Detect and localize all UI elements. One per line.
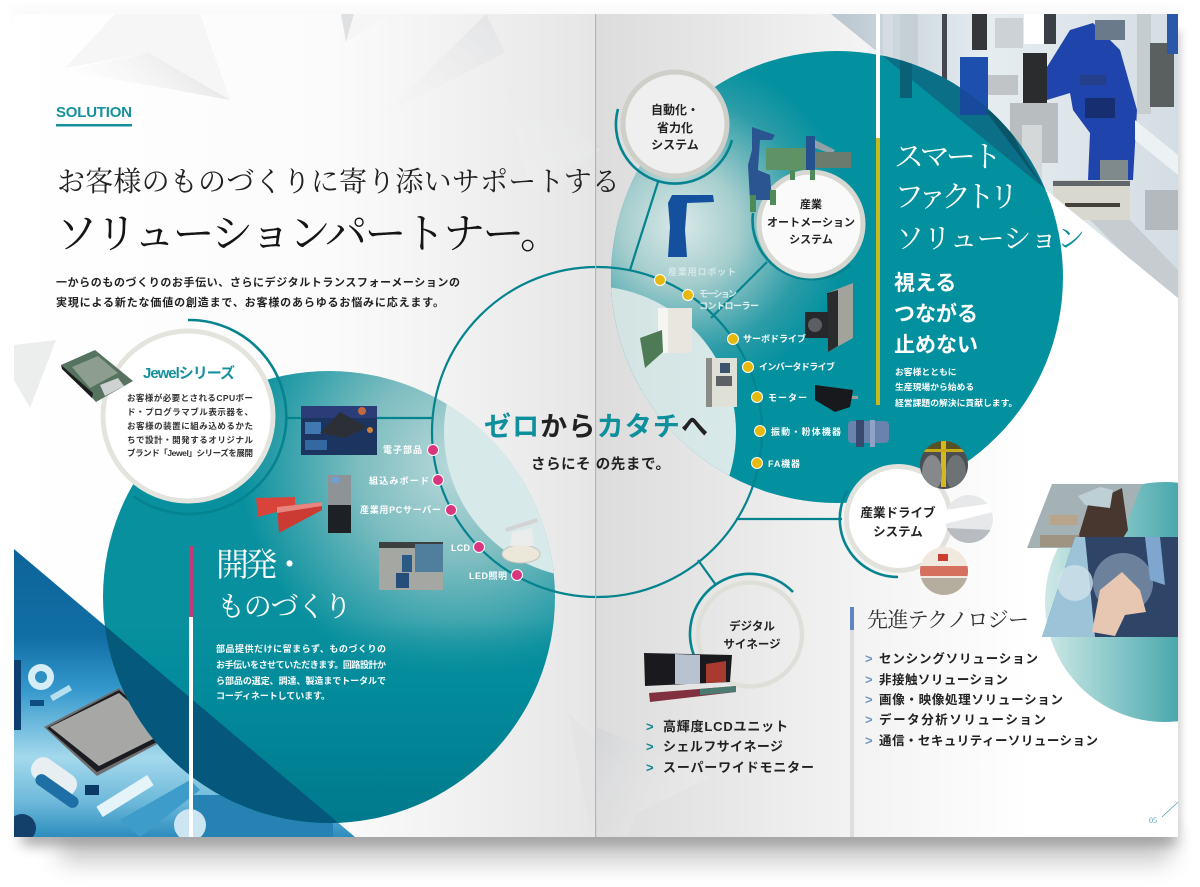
heading: smart factory solution: スマート: [894, 141, 1002, 174]
text: development description: ら部品の選定、調達、製造までトータルで: [216, 675, 386, 686]
heading tag: SOLUTION: SOLUTION: [56, 104, 132, 121]
pink markers and labels: 産業用PCサーバー: [360, 504, 441, 515]
yellow markers and labels: モーション: [699, 289, 737, 299]
icon: vibration motor: [848, 420, 889, 447]
panel: Jewel series circle: ブランド「Jewel」シリーズを展開: [127, 448, 253, 458]
icon: motor: [815, 385, 858, 412]
list: advanced technology solutions: 画像・映像処理ソリューション: [879, 692, 1063, 707]
list: signage products: シェルフサイネージ: [663, 739, 783, 754]
list: advanced technology solutions: >: [865, 733, 873, 748]
left page background: [14, 14, 596, 837]
text: development description: コーディネートしています。: [216, 690, 330, 701]
list: advanced technology solutions: データ分析ソリューション: [879, 712, 1046, 727]
yellow markers and labels: サーボドライブ: [743, 333, 806, 344]
panel: industrial automation system circle: オートメーション: [767, 216, 855, 229]
panel: industrial automation system circle: [759, 172, 863, 276]
heading: development and manufacturing: [189, 546, 352, 837]
panel: advanced technology teal circle: [1045, 482, 1178, 722]
list: signage products: >: [646, 719, 654, 734]
title: [56, 166, 620, 258]
panel: automation system circle: [623, 72, 727, 176]
text: smart factory description: お客様とともに: [895, 366, 957, 377]
decorative low-poly triangles: [14, 14, 710, 837]
pink markers and labels: LCD: [451, 543, 470, 553]
icon: servo drive: [805, 283, 853, 352]
list: advanced technology solutions: >: [865, 651, 873, 666]
photo: factory robot: [831, 14, 1178, 298]
panel: Jewel series circle: ド・プログラマブル表示器を、: [127, 407, 253, 417]
icon: LCD wall: [379, 542, 443, 590]
pink markers and labels: [360, 444, 522, 581]
center message: さらにそ の先まで。: [531, 456, 670, 473]
icon: boards and PC server: [256, 475, 351, 533]
photo: VR headset woman: [1027, 484, 1142, 548]
panel: industrial automation system circle: システム: [789, 233, 833, 246]
panel: digital signage circle: [698, 582, 802, 686]
panel: Jewel series circle: お客様の装置に組み込めるかた: [127, 421, 253, 431]
icon: chip on circuit board: [44, 688, 174, 776]
panel: Jewel series circle: ちで設計・開発するオリジナル: [127, 435, 253, 445]
list: advanced technology solutions: >: [865, 672, 873, 687]
photo: red-capped bottles: [920, 547, 968, 595]
list: signage products: 高輝度LCDユニット: [663, 719, 788, 734]
panel: automation system circle: 省力化: [657, 120, 693, 135]
panel: development teal circle: [103, 371, 555, 823]
panel: digital signage circle: デジタル: [729, 619, 775, 633]
panel: Jewel series circle: Jewelシリーズ: [143, 364, 235, 382]
panel: digital signage circle: サイネージ: [723, 638, 781, 651]
list: advanced technology solutions: センシングソリューション: [879, 651, 1038, 666]
icon: automation line robots: [748, 127, 851, 212]
spine fold line: [595, 14, 596, 837]
panel: Jewel series circle: お客様が必要とされるCPUボー: [127, 393, 253, 403]
panel: industrial drive system circle: 産業ドライブ: [860, 505, 936, 520]
heading: advanced technology: 先進テクノロジー: [867, 608, 1029, 632]
text: development description: 部品提供だけに留まらず、ものづくりの: [216, 643, 386, 654]
photo: white rolls: [945, 495, 993, 543]
list: signage products: >: [646, 760, 654, 775]
text: smart factory description: 生産現場から始める: [895, 381, 974, 392]
yellow markers and labels: FA機器: [768, 458, 800, 469]
pink markers and labels: 電子部品: [383, 444, 422, 455]
panel: smart factory teal circle: [611, 51, 1063, 503]
icon: Jewel circuit board: [61, 350, 133, 402]
intro text: 一からのものづくりのお手伝い、さらにデジタルトランスフォーメーションの: [56, 275, 460, 289]
panel: industrial drive system circle: システム: [873, 525, 923, 539]
yellow markers and labels: モーター: [768, 392, 807, 403]
panel: automation system circle: 自動化・: [651, 102, 699, 117]
icon: LED light: [502, 518, 540, 563]
text: see, connect, don't stop: 視える: [894, 272, 956, 295]
text: smart factory description: 経営課題の解決に貢献します。: [895, 397, 1017, 408]
photo: hand touching interface: [1042, 537, 1178, 637]
icon: blue robot arm: [668, 195, 714, 257]
icon: electronic parts photo: [301, 406, 377, 455]
heading: smart factory solution: ソリューション: [896, 224, 1085, 255]
list: signage products: スーパーワイドモニター: [663, 760, 814, 775]
pink markers and labels: LED照明: [469, 571, 507, 581]
icon: inverter: [706, 358, 737, 407]
title: お客様のものづくりに寄り添いサポートする: [57, 166, 620, 198]
heading: development and manufacturing: 開発・: [216, 547, 306, 584]
text: see, connect, don't stop: [894, 272, 978, 357]
text: see, connect, don't stop: つながる: [894, 302, 978, 326]
text: smart factory description: [895, 366, 1017, 408]
icon: motion controller: [640, 308, 692, 368]
intro text: 実現による新たな価値の創造まで、お客様のあらゆるお悩みに応えます。: [56, 295, 444, 309]
yellow markers and labels: [654, 266, 841, 469]
yellow markers and labels: 振動・粉体機器: [771, 426, 841, 437]
center message: [484, 411, 708, 473]
photo: tires: [920, 441, 968, 491]
yellow markers and labels: インバータドライブ: [759, 361, 835, 372]
panel: industrial automation system circle: 産業: [800, 197, 822, 211]
heading: development and manufacturing: ものづくり: [217, 592, 352, 623]
yellow markers and labels: 産業用ロボット: [668, 266, 736, 277]
page number: [1149, 802, 1178, 825]
intro text: [56, 275, 460, 309]
list: advanced technology solutions: >: [865, 692, 873, 707]
panel: industrial drive system circle: [846, 466, 950, 570]
center message: ゼロからカタチへ: [484, 411, 708, 442]
heading: advanced technology: [850, 607, 1029, 837]
text: see, connect, don't stop: 止めない: [894, 334, 978, 357]
list: signage products: [646, 719, 814, 775]
heading: smart factory solution: [876, 14, 1085, 405]
yellow markers and labels: コントローラー: [699, 301, 759, 311]
right page background: [596, 14, 1178, 837]
panel: automation system circle: システム: [651, 138, 699, 152]
list: advanced technology solutions: >: [865, 712, 873, 727]
heading: smart factory solution: ファクトリ: [894, 181, 1019, 214]
panel: bottom-left circuit board triangle: [8, 549, 355, 842]
list: advanced technology solutions: [865, 651, 1098, 748]
text: development description: [216, 643, 386, 701]
title: ソリューションパートナー。: [56, 212, 562, 258]
pink markers and labels: 組込みボード: [369, 475, 429, 486]
page number: 05: [1149, 816, 1157, 825]
list: advanced technology solutions: 非接触ソリューション: [879, 672, 1008, 687]
connector: central ring with branches: [133, 109, 898, 662]
panel: Jewel series circle: [103, 331, 273, 501]
text: development description: お手伝いをさせていただきます。回路設計か: [216, 659, 386, 670]
list: advanced technology solutions: 通信・セキュリティーソリューション: [879, 733, 1098, 748]
list: signage products: >: [646, 739, 654, 754]
icon: signage displays: [644, 653, 736, 702]
